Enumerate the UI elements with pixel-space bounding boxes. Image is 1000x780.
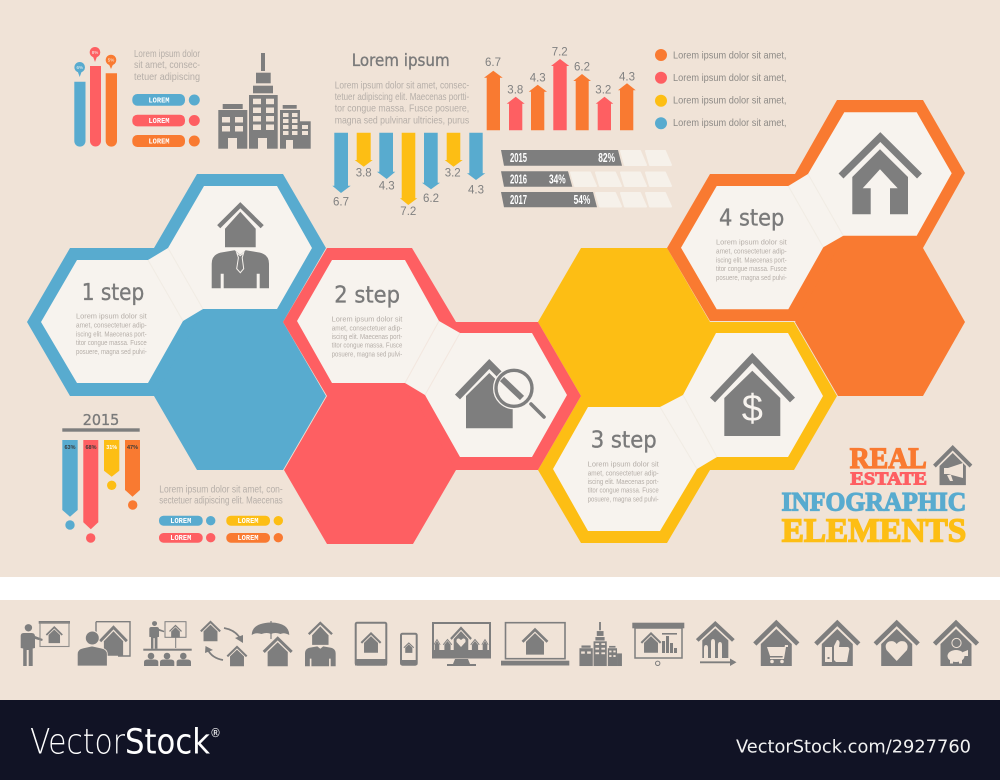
step 3 text: titor congue massa. Fusce (588, 488, 659, 495)
chart: 2015 ribbons (62, 411, 140, 543)
icon: phone (400, 634, 417, 665)
down arrow chart: 7.2 (400, 206, 416, 218)
middle paragraph: magna sed pulvinar ultricies, purus (335, 114, 469, 126)
lower-left paragraph: Lorem ipsum dolor sit amet, con- (159, 484, 283, 496)
lower-left paragraph (159, 484, 283, 506)
progress bars: 82% (598, 151, 615, 165)
step 1 text: iscing elit. Maecenas port- (76, 331, 147, 338)
down arrow chart (332, 133, 485, 218)
down arrow chart: 4.3 (468, 184, 484, 196)
step 2 text: Lorem ipsum dolor sit (332, 317, 402, 324)
icon: house with megaphone (934, 448, 971, 485)
step 4 text: posuere, magna sed pulvi- (716, 275, 787, 282)
panel: step 1 blue hexagons (27, 174, 326, 470)
icon: laptop (501, 623, 569, 666)
up arrow chart: 6.7 (485, 57, 501, 69)
step 4 text: titor congue massa. Fusce (716, 266, 787, 273)
lower-left legend pills: LOREM (237, 518, 259, 526)
up arrow chart: 4.3 (530, 73, 546, 85)
step 4 text: amet, consectetuer adip- (716, 248, 787, 255)
title: real estate infographic elements: INFOGRAPHIC (782, 488, 966, 517)
panel: step 3 yellow hexagons (538, 248, 837, 543)
icon: insured house (252, 621, 292, 666)
icon: house with magnifier (458, 364, 544, 428)
step 1 text (76, 313, 147, 356)
top-left legend pills (132, 94, 200, 147)
top-left legend pills: LOREM (148, 138, 170, 146)
lower-left legend pills (159, 516, 283, 543)
step 3 text: iscing elit. Maecenas port- (588, 479, 659, 486)
down arrow chart: 6.2 (423, 193, 439, 205)
step 3 text: amet, consectetuer adip- (588, 470, 659, 477)
panel: step 4 orange hexagons (667, 100, 965, 396)
up arrow chart: 3.2 (595, 84, 611, 96)
icon: seminar (143, 621, 192, 666)
chart: 2015 ribbons: 47% (127, 445, 138, 451)
up arrow chart: 4.3 (619, 72, 635, 84)
panel: step 2 red hexagons (283, 248, 581, 544)
step 1 text: titor congue massa. Fusce (76, 340, 147, 347)
progress bars: 2016 (510, 172, 527, 186)
icon: house-headed agent (305, 623, 336, 666)
progress bars: 2017 (510, 193, 527, 207)
lower-left paragraph: sectetuer adipiscing elit. Maecenas (159, 494, 283, 506)
step 2 text: iscing elit. Maecenas port- (332, 334, 403, 341)
icon: monitor with houses (432, 623, 491, 666)
top-right legend: Lorem ipsum dolor sit amet, (673, 117, 786, 129)
title: real estate infographic elements: ELEMENTS (782, 513, 966, 550)
middle paragraph: tetuer adipiscing elit. Maecenas portti- (335, 91, 470, 103)
footer logo: ® (210, 726, 221, 740)
top-left bar chart: 5% (108, 58, 114, 63)
chart: 2015 ribbons: 68% (85, 445, 97, 451)
lower-left legend pills: LOREM (170, 518, 191, 526)
step 2 text: posuere, magna sed pulvi- (332, 351, 403, 358)
step 4 text (716, 239, 787, 282)
middle paragraph: Lorem ipsum dolor sit amet, consec- (335, 79, 470, 91)
progress bars: 54% (574, 193, 590, 207)
top-left text: tetuer adipiscing (134, 71, 200, 83)
icon: house exchange cycle (201, 622, 247, 666)
icon: house with dollar (712, 358, 792, 436)
footer logo: Vector (30, 722, 126, 762)
progress bars: 2015 (510, 151, 527, 165)
up arrow chart: 7.2 (552, 46, 568, 58)
step 3 text: Lorem ipsum dolor sit (588, 462, 659, 469)
middle paragraph: tor congue massa. Fusce posuere, (335, 103, 469, 115)
step 4 text: iscing elit. Maecenas port- (716, 257, 787, 264)
down arrow chart: 4.3 (379, 180, 395, 192)
footer band (0, 700, 1000, 780)
chart: 2015 ribbons: 31% (106, 445, 117, 451)
icon: tablet (355, 623, 387, 666)
top-left bar chart: 8% (92, 50, 98, 55)
progress bars: 34% (549, 172, 566, 186)
icon: house with thumbs up (816, 623, 859, 666)
step 2 text (332, 317, 403, 358)
icon: house with piggy bank (934, 623, 978, 666)
down arrow chart: 3.8 (356, 168, 372, 180)
progress bars (501, 150, 671, 207)
top-right legend: Lorem ipsum dolor sit amet, (673, 94, 786, 106)
icon: presenter with board (21, 621, 70, 666)
footer logo (30, 722, 221, 762)
up arrow chart: 3.8 (507, 84, 523, 96)
step 1 heading: 1 step (82, 280, 144, 306)
step 3 heading: 3 step (591, 427, 657, 453)
footer image id: VectorStock.com/2927760 (736, 737, 971, 758)
top-left text: sit amet, consec- (134, 59, 200, 71)
up arrow chart (484, 46, 636, 130)
down arrow chart: 6.7 (333, 197, 349, 209)
step 1 text: Lorem ipsum dolor sit (76, 313, 147, 320)
top-left legend pills: LOREM (148, 118, 170, 126)
top-right legend: Lorem ipsum dolor sit amet, (673, 72, 786, 84)
step 1 text: posuere, magna sed pulvi- (76, 349, 147, 356)
bottom icon row (21, 621, 977, 666)
down arrow chart: 3.2 (445, 168, 461, 180)
top-left bar chart (74, 47, 117, 147)
icon: house-headed businessman (212, 205, 269, 288)
up arrow chart: 6.2 (574, 62, 590, 74)
icon: city buildings small (579, 622, 622, 666)
step 3 text (588, 462, 659, 503)
top-left text (134, 48, 200, 83)
title: real estate infographic elements: REAL (850, 442, 927, 475)
top-right legend (655, 49, 786, 129)
step 2 heading: 2 step (334, 283, 400, 309)
icon: house market chart (697, 624, 736, 666)
step 1 text: amet, consectetuer adip- (76, 322, 147, 329)
icon: house with up arrow (841, 137, 920, 214)
lower-left legend pills: LOREM (170, 535, 191, 543)
title: real estate infographic elements (782, 442, 971, 550)
icon: house with cart (755, 623, 798, 666)
title: real estate infographic elements: ESTATE (850, 469, 927, 489)
top-left text: Lorem ipsum dolor (134, 48, 200, 60)
icon: city buildings (218, 53, 311, 149)
icon: projection screen (632, 623, 684, 666)
step 2 text: amet, consectetuer adip- (332, 325, 403, 332)
lower-left legend pills: LOREM (237, 535, 259, 543)
middle paragraph (335, 79, 470, 126)
white separator strip (0, 577, 1000, 600)
step 3 text: posuere, magna sed pulvi- (588, 496, 659, 503)
icon: house with heart (875, 623, 918, 666)
step 4 text: Lorem ipsum dolor sit (716, 239, 787, 246)
top-left bar chart: 6% (76, 65, 83, 70)
top-left legend pills: LOREM (148, 98, 170, 106)
top-right legend: Lorem ipsum dolor sit amet, (673, 49, 786, 61)
footer logo: Stock (125, 722, 211, 762)
step 2 text: titor congue massa. Fusce (332, 343, 402, 350)
step 4 heading: 4 step (719, 206, 784, 232)
icon: agent with house picture (77, 622, 130, 666)
icon: house with dollar: $ (742, 388, 763, 430)
chart: 2015 ribbons: 63% (64, 445, 76, 451)
2015 heading: 2015 (83, 411, 119, 429)
heading: Lorem ipsum: Lorem ipsum (352, 51, 450, 71)
